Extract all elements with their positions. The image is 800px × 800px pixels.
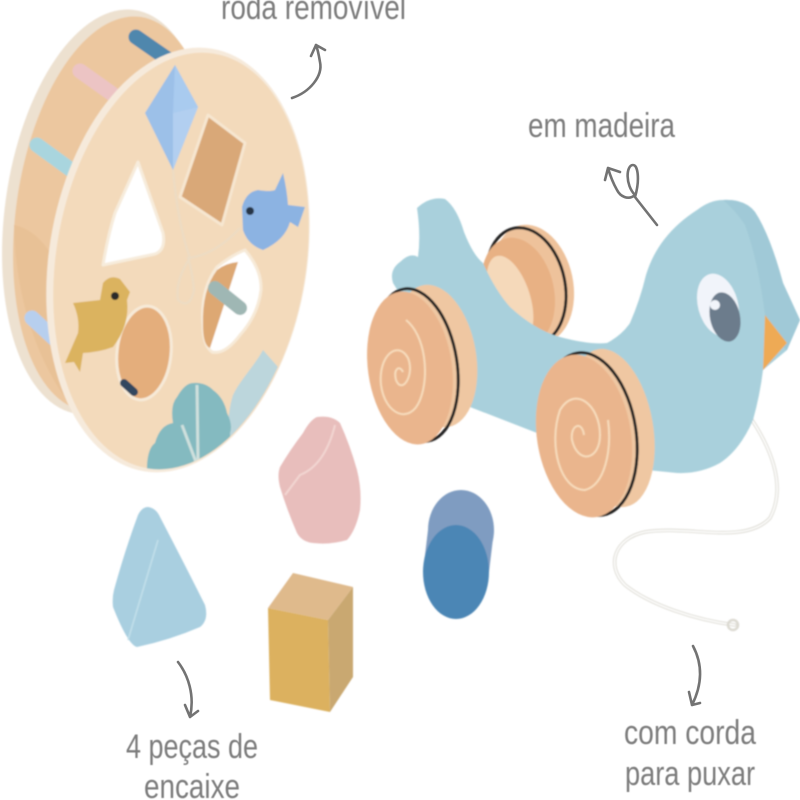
string bbox=[615, 420, 777, 630]
triangle hole bbox=[103, 162, 164, 265]
label: 4 peças de encaixe bbox=[126, 728, 258, 800]
panel: shape-sorter wheel bbox=[2, 9, 310, 473]
right wheel bbox=[525, 342, 666, 524]
egg hole bbox=[112, 303, 176, 403]
front disc bbox=[17, 28, 339, 492]
spiral bbox=[555, 399, 609, 490]
yellow bird bbox=[65, 277, 130, 372]
blue triangle piece bbox=[113, 507, 206, 647]
wheel rods bbox=[32, 37, 172, 342]
panel: four shape pieces bbox=[113, 417, 494, 712]
back wheel bbox=[471, 217, 585, 353]
plants bbox=[147, 350, 278, 480]
label: com corda para puxar bbox=[624, 714, 756, 793]
bird body bbox=[392, 198, 800, 473]
blue bird bbox=[242, 173, 305, 250]
spiral bbox=[381, 320, 425, 414]
arrow: com corda bbox=[689, 646, 700, 705]
left wheel bbox=[358, 278, 488, 450]
arrow: roda removível bbox=[292, 45, 325, 98]
pink piece bbox=[278, 417, 361, 544]
back disc bbox=[0, 0, 237, 428]
bird top edge bbox=[723, 200, 800, 350]
label: com corda para puxar: para puxar bbox=[625, 755, 755, 793]
label: em madeira: em madeira bbox=[528, 107, 675, 145]
arrow: 4 peças bbox=[178, 662, 198, 717]
panel: pull-along bird toy bbox=[358, 198, 800, 630]
right hole with rod bbox=[203, 250, 261, 352]
kite bbox=[145, 65, 240, 303]
eye bbox=[690, 269, 746, 345]
label: 4 peças de encaixe: 4 peças de bbox=[126, 728, 258, 766]
blue cylinder piece bbox=[423, 490, 494, 619]
square hole bbox=[180, 115, 245, 225]
blue bird eye bbox=[246, 207, 254, 215]
label: com corda para puxar: com corda bbox=[624, 714, 756, 752]
arrow: em madeira bbox=[605, 165, 657, 225]
yellow block piece bbox=[268, 573, 353, 712]
beak bbox=[763, 315, 787, 370]
kite string bbox=[173, 170, 240, 303]
